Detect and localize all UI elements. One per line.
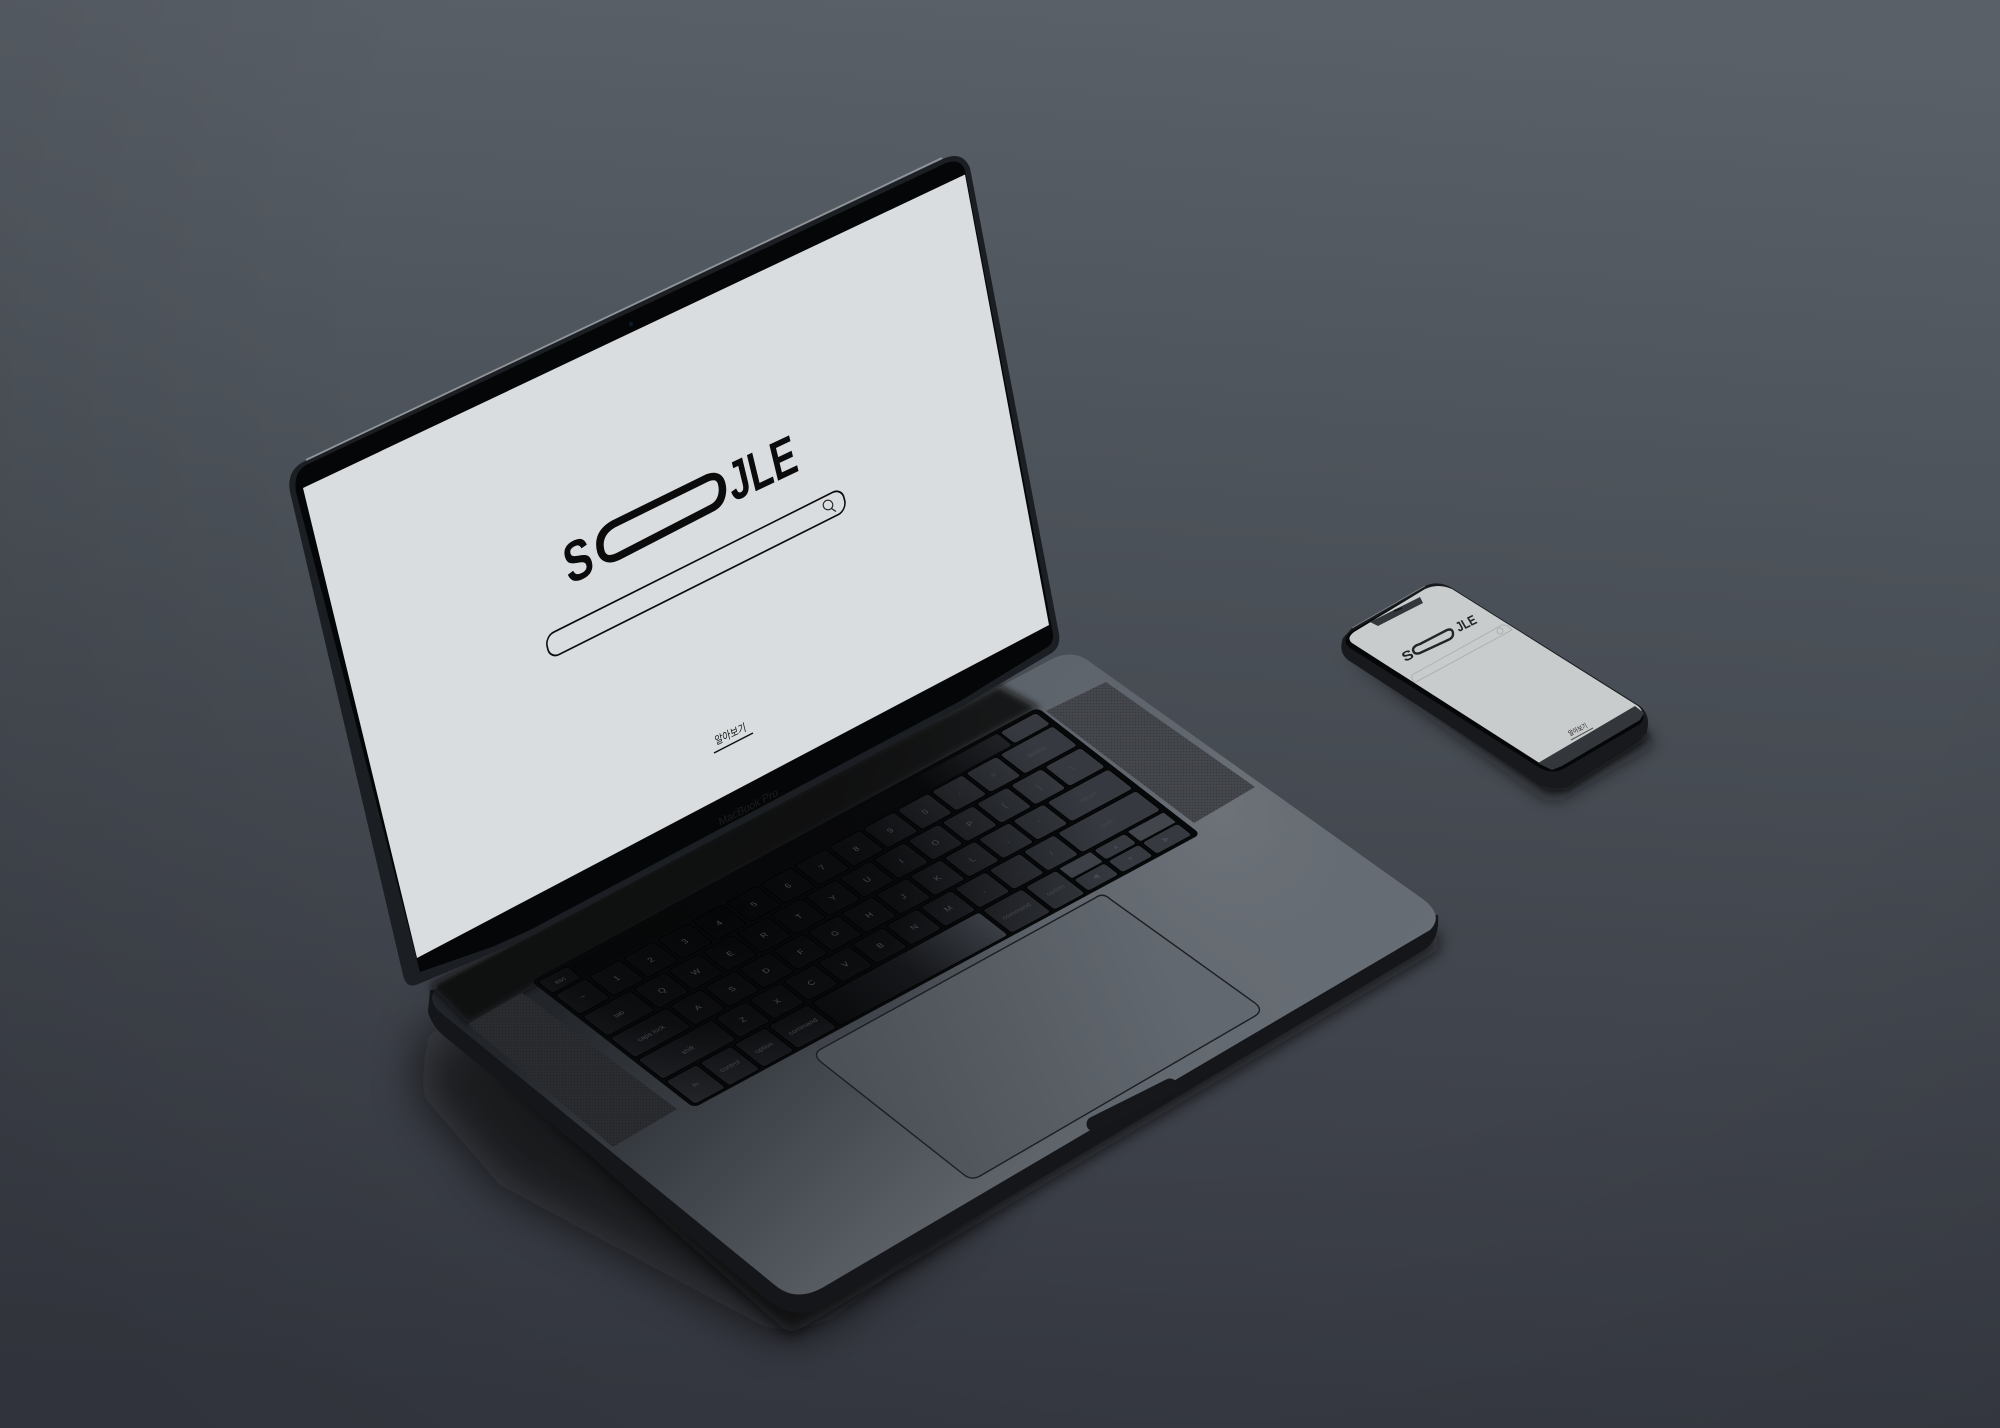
laptop lid	[289, 156, 1059, 986]
number row: 3	[679, 937, 691, 945]
home row: caps lock	[636, 1024, 668, 1043]
lid outer shell	[289, 156, 1059, 986]
phone screen	[1349, 586, 1642, 766]
right speaker grille	[1046, 682, 1255, 823]
home row: return	[1078, 791, 1100, 804]
home row: D	[759, 966, 772, 975]
deck rear corner highlight	[432, 654, 1436, 1295]
logo stretched O search pill	[600, 476, 722, 559]
keyboard	[531, 707, 1201, 1108]
screen content	[545, 424, 847, 753]
phone logo S: S	[1398, 646, 1416, 665]
modifier row: command	[1001, 902, 1034, 921]
trackpad	[816, 895, 1260, 1178]
modifier row: ▼	[1125, 855, 1137, 863]
bottom letter row: M	[941, 904, 955, 913]
number row: 7	[816, 863, 828, 871]
learn more link: 알아보기	[713, 720, 747, 748]
home row: ;	[1001, 837, 1011, 844]
qwerty row: E	[724, 949, 737, 958]
home row: J	[897, 892, 909, 900]
phone body	[1341, 583, 1648, 788]
modifier row: option	[753, 1041, 776, 1055]
qwerty row: tab	[613, 1010, 627, 1019]
qwerty row: I	[896, 857, 906, 864]
lid top highlight	[306, 158, 942, 460]
home row: '	[1036, 819, 1045, 826]
icon: magnifier	[823, 500, 836, 512]
qwerty row: W	[688, 967, 703, 977]
phone search bar	[1412, 625, 1512, 682]
left speaker grille	[468, 993, 677, 1147]
qwerty row: U	[860, 875, 874, 884]
search bar	[545, 488, 847, 659]
laptop cast shadow	[418, 930, 1438, 1335]
bottom letter row: /	[1046, 849, 1057, 856]
home row	[610, 769, 1133, 1058]
function row: esc	[553, 976, 569, 985]
front opening notch	[1094, 1086, 1170, 1124]
number row: 9	[884, 826, 896, 834]
number row: 6	[782, 881, 794, 890]
modifier row: option	[1045, 884, 1067, 897]
phone logo pill	[1413, 630, 1453, 654]
qwerty row: R	[757, 931, 771, 939]
home row: L	[966, 855, 978, 863]
MacBook Pro badge: MacBook Pro	[718, 787, 779, 829]
bottom letter row: C	[805, 978, 818, 987]
number row: 4	[713, 919, 725, 927]
number row	[555, 726, 1078, 1014]
qwerty row: O	[928, 838, 942, 847]
qwerty row: [	[999, 801, 1010, 809]
modifier row: command	[787, 1018, 820, 1037]
number row: 5	[748, 900, 760, 908]
home row: S	[726, 984, 739, 993]
bottom letter row: B	[874, 941, 887, 950]
bottom letter row: X	[771, 997, 784, 1005]
phone bezel	[1345, 586, 1643, 772]
bottom letter row: Z	[737, 1015, 749, 1024]
bottom letter row: V	[839, 960, 852, 969]
bottom letter row: .	[1012, 868, 1021, 875]
phone bottom band	[1538, 706, 1644, 770]
keyboard well	[531, 707, 1201, 1108]
number row: ~	[576, 992, 589, 1001]
number row: 2	[645, 955, 657, 964]
phone logo JLE: JLE	[1452, 612, 1479, 635]
bottom letter row	[638, 791, 1161, 1079]
number row: 0	[919, 807, 931, 816]
phone notch	[1370, 597, 1423, 626]
home row: K	[931, 873, 944, 882]
number row: 8	[850, 845, 862, 853]
logo letter S: S	[557, 523, 599, 597]
qwerty row: ]	[1033, 783, 1043, 790]
bottom letter row: shift	[1099, 819, 1116, 829]
modifier row: control	[718, 1059, 743, 1074]
webcam	[629, 322, 633, 326]
home row: G	[828, 929, 842, 938]
number row: =	[987, 771, 999, 779]
function row	[538, 713, 1051, 993]
qwerty row: Y	[827, 893, 840, 902]
home row: A	[691, 1003, 705, 1012]
phone upper edge highlight	[1352, 586, 1425, 628]
home row: H	[862, 910, 876, 919]
qwerty row	[582, 748, 1105, 1036]
qwerty row: Q	[655, 985, 669, 995]
qwerty row: P	[964, 819, 977, 828]
number row: -	[954, 789, 964, 797]
number row: delete	[1026, 746, 1049, 759]
phone earpiece	[1394, 608, 1402, 611]
qwerty row: T	[793, 912, 805, 920]
bottom letter row: ,	[978, 887, 987, 894]
modifier row: ◀	[1090, 873, 1103, 881]
lid bezel	[295, 162, 1053, 972]
deck highlight	[432, 654, 1436, 1295]
logo letters JLE: JLE	[722, 424, 803, 514]
modifier row: ▶	[1160, 835, 1172, 844]
bottom letter row: shift	[680, 1045, 697, 1056]
bottom letter row: N	[908, 923, 921, 931]
modifier row: ▲	[1110, 843, 1121, 851]
qwerty row: \	[1068, 765, 1078, 772]
laptop base chassis edge	[428, 915, 1438, 1313]
number row: 1	[611, 974, 623, 982]
home row: F	[795, 948, 807, 956]
hinge shade	[430, 685, 1040, 1024]
phone	[1341, 583, 1648, 788]
modifier row: fn	[691, 1081, 702, 1088]
laptop deck	[432, 654, 1436, 1295]
phone cast shadow	[1340, 650, 1655, 800]
laptop screen	[303, 174, 1049, 958]
laptop	[289, 156, 1438, 1313]
phone learn more link: 알아보기	[1566, 721, 1589, 738]
modifier row	[666, 812, 1193, 1104]
